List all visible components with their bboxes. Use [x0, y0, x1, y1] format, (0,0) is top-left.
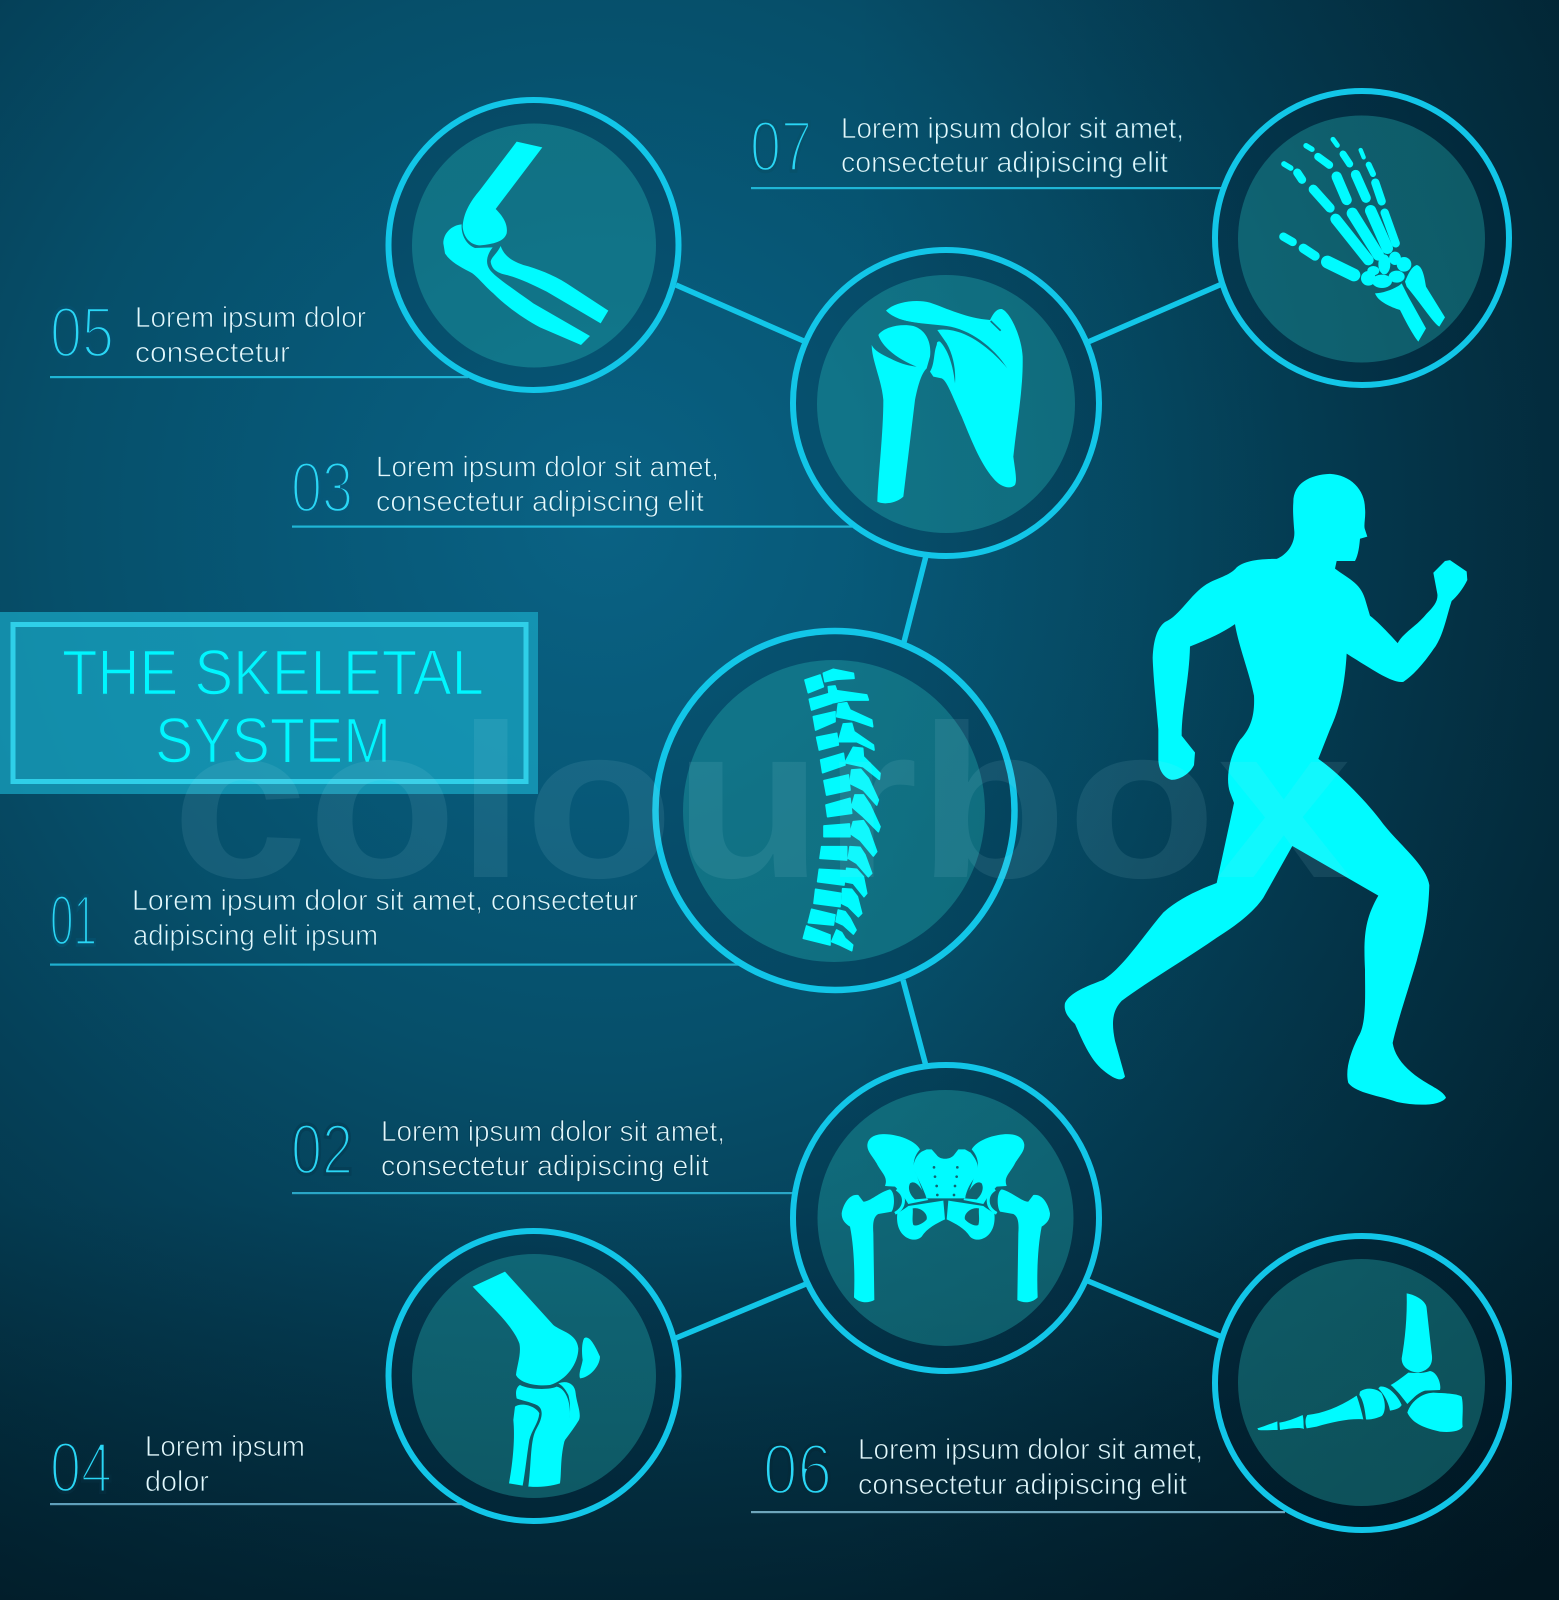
icon: shoulder joint	[872, 301, 1023, 503]
label 03: consectetur adipiscing elit	[376, 486, 704, 518]
label 03: 03	[291, 449, 353, 528]
label 03: Lorem ipsum dolor sit amet,	[376, 452, 719, 484]
label 04: dolor	[145, 1466, 209, 1498]
label 07: Lorem ipsum dolor sit amet,	[841, 113, 1184, 145]
label 06: Lorem ipsum dolor sit amet,	[858, 1434, 1203, 1466]
connector lines between circles	[676, 284, 1222, 1338]
icon: knee joint	[473, 1272, 600, 1487]
label 04	[50, 1429, 466, 1508]
label 05: Lorem ipsum dolor	[135, 302, 366, 334]
heading: SYSTEM	[155, 704, 391, 776]
label 03	[291, 449, 852, 528]
label 02: Lorem ipsum dolor sit amet,	[381, 1116, 725, 1148]
heading: THE SKELETAL	[62, 636, 484, 708]
label 02	[291, 1111, 794, 1194]
label 02: consectetur adipiscing elit	[381, 1150, 709, 1182]
label 04: 04	[50, 1429, 112, 1508]
title panel	[0, 612, 538, 794]
label 01	[50, 882, 740, 966]
icon: foot bones	[1257, 1293, 1463, 1432]
icon: elbow joint	[443, 142, 608, 345]
panel: hand	[1215, 91, 1509, 385]
label 01: 01	[50, 882, 97, 961]
panel: shoulder	[793, 250, 1099, 556]
label 06	[751, 1431, 1285, 1513]
panel: pelvis	[793, 1065, 1099, 1371]
label 06: 06	[763, 1431, 832, 1510]
icon: running human figure	[1065, 474, 1467, 1105]
icon: pelvis and hip joints	[842, 1134, 1050, 1302]
panel: foot	[1215, 1236, 1509, 1530]
label 06: consectetur adipiscing elit	[858, 1469, 1187, 1501]
label 07: consectetur adipiscing elit	[841, 147, 1168, 179]
label 01: adipiscing elit ipsum	[133, 920, 378, 952]
label 07: 07	[750, 108, 812, 187]
heading	[62, 636, 484, 776]
panel: knee	[388, 1231, 678, 1521]
label 07	[750, 108, 1221, 189]
watermark: colourbox	[172, 681, 1352, 924]
label 01: Lorem ipsum dolor sit amet, consectetur	[132, 885, 638, 917]
label 05: 05	[50, 294, 114, 373]
icon: spine vertebrae	[803, 669, 880, 951]
label 02: 02	[291, 1111, 353, 1190]
label 04: Lorem ipsum	[145, 1431, 305, 1463]
icon: hand bones	[1283, 139, 1445, 342]
panel: spine	[656, 631, 1014, 990]
panel: elbow	[388, 100, 678, 390]
label 05: consectetur	[135, 337, 290, 369]
label 05	[50, 294, 468, 378]
